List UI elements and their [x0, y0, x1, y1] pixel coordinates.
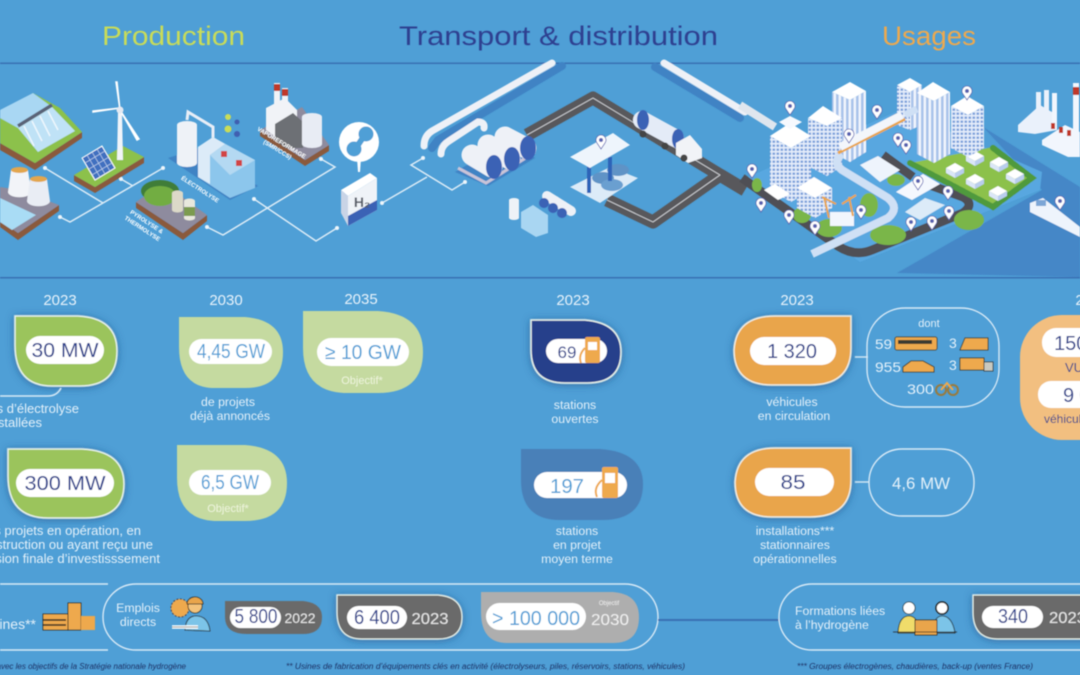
gardens	[752, 147, 1035, 245]
value: over 100 000 by 2030	[481, 592, 639, 643]
callout: vehicle breakdown: 3	[949, 335, 957, 351]
value: 340 in 2023	[973, 595, 1080, 639]
callout: vehicle breakdown: 59	[875, 336, 892, 352]
callout: vehicle breakdown: 3	[949, 357, 957, 373]
panel: stations	[521, 292, 643, 566]
callout: vehicle breakdown: dont	[918, 318, 940, 330]
panel: usages 2030	[1020, 292, 1080, 440]
icon: H2 storage box	[341, 173, 377, 226]
circuit lines	[43, 156, 467, 241]
illustration: usages city	[740, 78, 1080, 277]
icon: pyrolysis unit	[136, 180, 207, 240]
title: Usages: Usages	[882, 21, 976, 51]
blob: 4,45 GW: 4,45 GW	[197, 341, 265, 363]
text: formations: Formations liées	[795, 604, 885, 618]
label: vaporeformage: VAPOREFORMAGE	[256, 127, 306, 160]
icon: garbage truck	[960, 338, 988, 350]
icon: training people	[893, 602, 957, 635]
icon: tanker truck	[637, 110, 702, 163]
value: 340 in 2023: 340	[998, 606, 1028, 628]
illustration: production chain	[0, 82, 467, 243]
blob: objective vehicles	[1020, 315, 1080, 440]
icon: refuelling station	[570, 133, 638, 203]
year 2023: 2023	[43, 292, 77, 309]
blob: at least 10 GW	[303, 311, 423, 393]
blob: 1 320 vehicles: 1 320	[767, 341, 817, 363]
panel: production 2030	[177, 292, 287, 521]
label: pyrolyse et thermolyse: THERMOLYSE	[123, 216, 161, 243]
caption: planned stations: en projet	[553, 538, 602, 552]
callout: 4,6 MW	[855, 449, 974, 516]
map pins	[747, 86, 1065, 235]
value: over 100 000 by 2030: 2030	[591, 612, 629, 629]
callout: vehicle breakdown: 300	[907, 381, 934, 397]
value: 5 800 in 2022	[225, 601, 322, 634]
icon: H2 pump	[596, 467, 618, 498]
monorail and track	[812, 109, 917, 254]
value: over 100 000 by 2030: Objectif	[599, 601, 620, 607]
icon: car	[903, 361, 934, 372]
callout: vehicle breakdown: 955	[875, 359, 901, 375]
icon: truck	[960, 358, 993, 371]
blob: 1 320 vehicles	[734, 316, 851, 385]
station buildings	[830, 156, 945, 226]
footnote: stationary uses: *** Groupes électrogènes, chaudières, back-up (ventes France)	[797, 662, 1033, 671]
value: 5 800 in 2022: 2022	[284, 610, 316, 626]
icon: bus	[895, 337, 937, 350]
panel: production 2023	[0, 292, 160, 566]
text: emplois directs: directs	[120, 615, 156, 629]
value: 5 800 in 2022: 5 800	[234, 606, 278, 628]
label: electrolyse: ÉLECTROLYSE	[180, 174, 221, 205]
water	[897, 127, 1080, 277]
icon: H2 molecule bubble	[339, 122, 379, 172]
storage tanks	[455, 136, 536, 186]
blob: 300 MW: 300 MW	[24, 473, 106, 495]
panel: training strip	[779, 584, 1080, 650]
caption: open stations: ouvertes	[551, 412, 599, 426]
footnote: factories: ** Usines de fabrication d’équipements clés en activité (électrolyseurs, piles, réservoirs, stations, véhicules)	[286, 662, 685, 671]
caption: planned stations: moyen terme	[541, 552, 613, 566]
caption: stationary installations: stationnaires	[760, 538, 830, 552]
label: pyrolyse et thermolyse: PYROLYSE &	[129, 210, 164, 236]
callout: vehicle breakdown	[855, 308, 999, 407]
title: Transport & distribution: Transport & distribution	[399, 21, 718, 51]
caption: planned stations: stations	[556, 524, 598, 538]
icon: factory	[1018, 83, 1080, 157]
pipeline to city	[740, 105, 775, 127]
caption: open stations: stations	[554, 398, 596, 412]
callout: 4,6 MW: 4,6 MW	[892, 474, 950, 493]
blob: 197 stations	[521, 449, 643, 520]
houses	[946, 151, 1024, 201]
connector between strips	[658, 619, 779, 621]
blob: 69 stations	[531, 320, 621, 383]
blob: at least 10 GW: Objectif*	[341, 375, 384, 387]
blob: 300 MW	[8, 449, 124, 518]
icon: hydro dam	[0, 93, 82, 170]
blob: 6,5 GW: Objectif*	[207, 503, 250, 515]
blob: at least 10 GW: ≥ 10 GW	[325, 342, 401, 364]
connector	[0, 388, 61, 396]
value: over 100 000 by 2030: > 100 000	[492, 608, 580, 630]
blob: 69 stations: 69	[558, 343, 576, 362]
caption: stationary installations: opérationnelles	[753, 552, 837, 566]
icon: nuclear plant	[0, 167, 59, 240]
illustration: transport and distribution	[424, 63, 745, 237]
icon: H2 storage box: H₂	[354, 194, 370, 210]
year 2023: 2023	[780, 292, 814, 309]
text: emplois directs: Emplois	[116, 601, 160, 615]
blob: 30 MW: 30 MW	[32, 340, 99, 362]
pipelines	[424, 63, 745, 154]
text: formations: à l’hydrogène	[795, 618, 869, 632]
panel: usages 2023	[734, 292, 999, 566]
year 2023: 2023	[556, 292, 590, 309]
panel: jobs strip	[103, 584, 658, 650]
blob: 85 installations	[735, 448, 851, 517]
value: 6 400 in 2023: 6 400	[354, 607, 400, 629]
icon: steam reforming unit	[260, 83, 329, 166]
blob: 4,45 GW	[179, 317, 283, 388]
icon: H2 pump	[580, 337, 600, 363]
blob: 85 installations: 85	[780, 472, 806, 494]
panel: production 2035	[303, 291, 423, 393]
caption: vehicles: véhicules	[766, 395, 818, 409]
icon: worker with wrench	[171, 597, 210, 631]
year 2030: 2030	[209, 292, 243, 309]
blob: 6,5 GW: 6,5 GW	[201, 472, 259, 494]
blob: 6,5 GW	[177, 445, 287, 521]
icon: small production site	[509, 195, 571, 237]
blob: 197 stations: 197	[550, 476, 584, 498]
title: Production: Production	[102, 21, 245, 51]
caption: stationary installations: installations***	[756, 524, 835, 538]
value: 6 400 in 2023: 2023	[412, 611, 449, 628]
icon: bicycle	[936, 383, 958, 395]
icon: wind turbine and solar panel	[74, 82, 144, 193]
city base and ring road	[742, 100, 1042, 262]
caption: vehicles: en circulation	[758, 409, 830, 423]
icon: electrolyser	[168, 112, 258, 200]
cranes	[822, 195, 856, 218]
caption: announced projects: de projets	[201, 395, 255, 409]
value: 6 400 in 2023	[337, 595, 462, 639]
blob: 30 MW	[15, 316, 117, 386]
panel: factories strip	[0, 584, 108, 650]
road	[527, 98, 745, 222]
label: vaporeformage: (SMR/CCS)	[262, 140, 292, 161]
icon: ship	[1030, 198, 1080, 237]
year 2035: 2035	[344, 291, 378, 308]
buildings	[764, 78, 984, 218]
caption: announced projects: déjà annoncés	[190, 409, 270, 423]
icon: factory	[43, 603, 95, 630]
